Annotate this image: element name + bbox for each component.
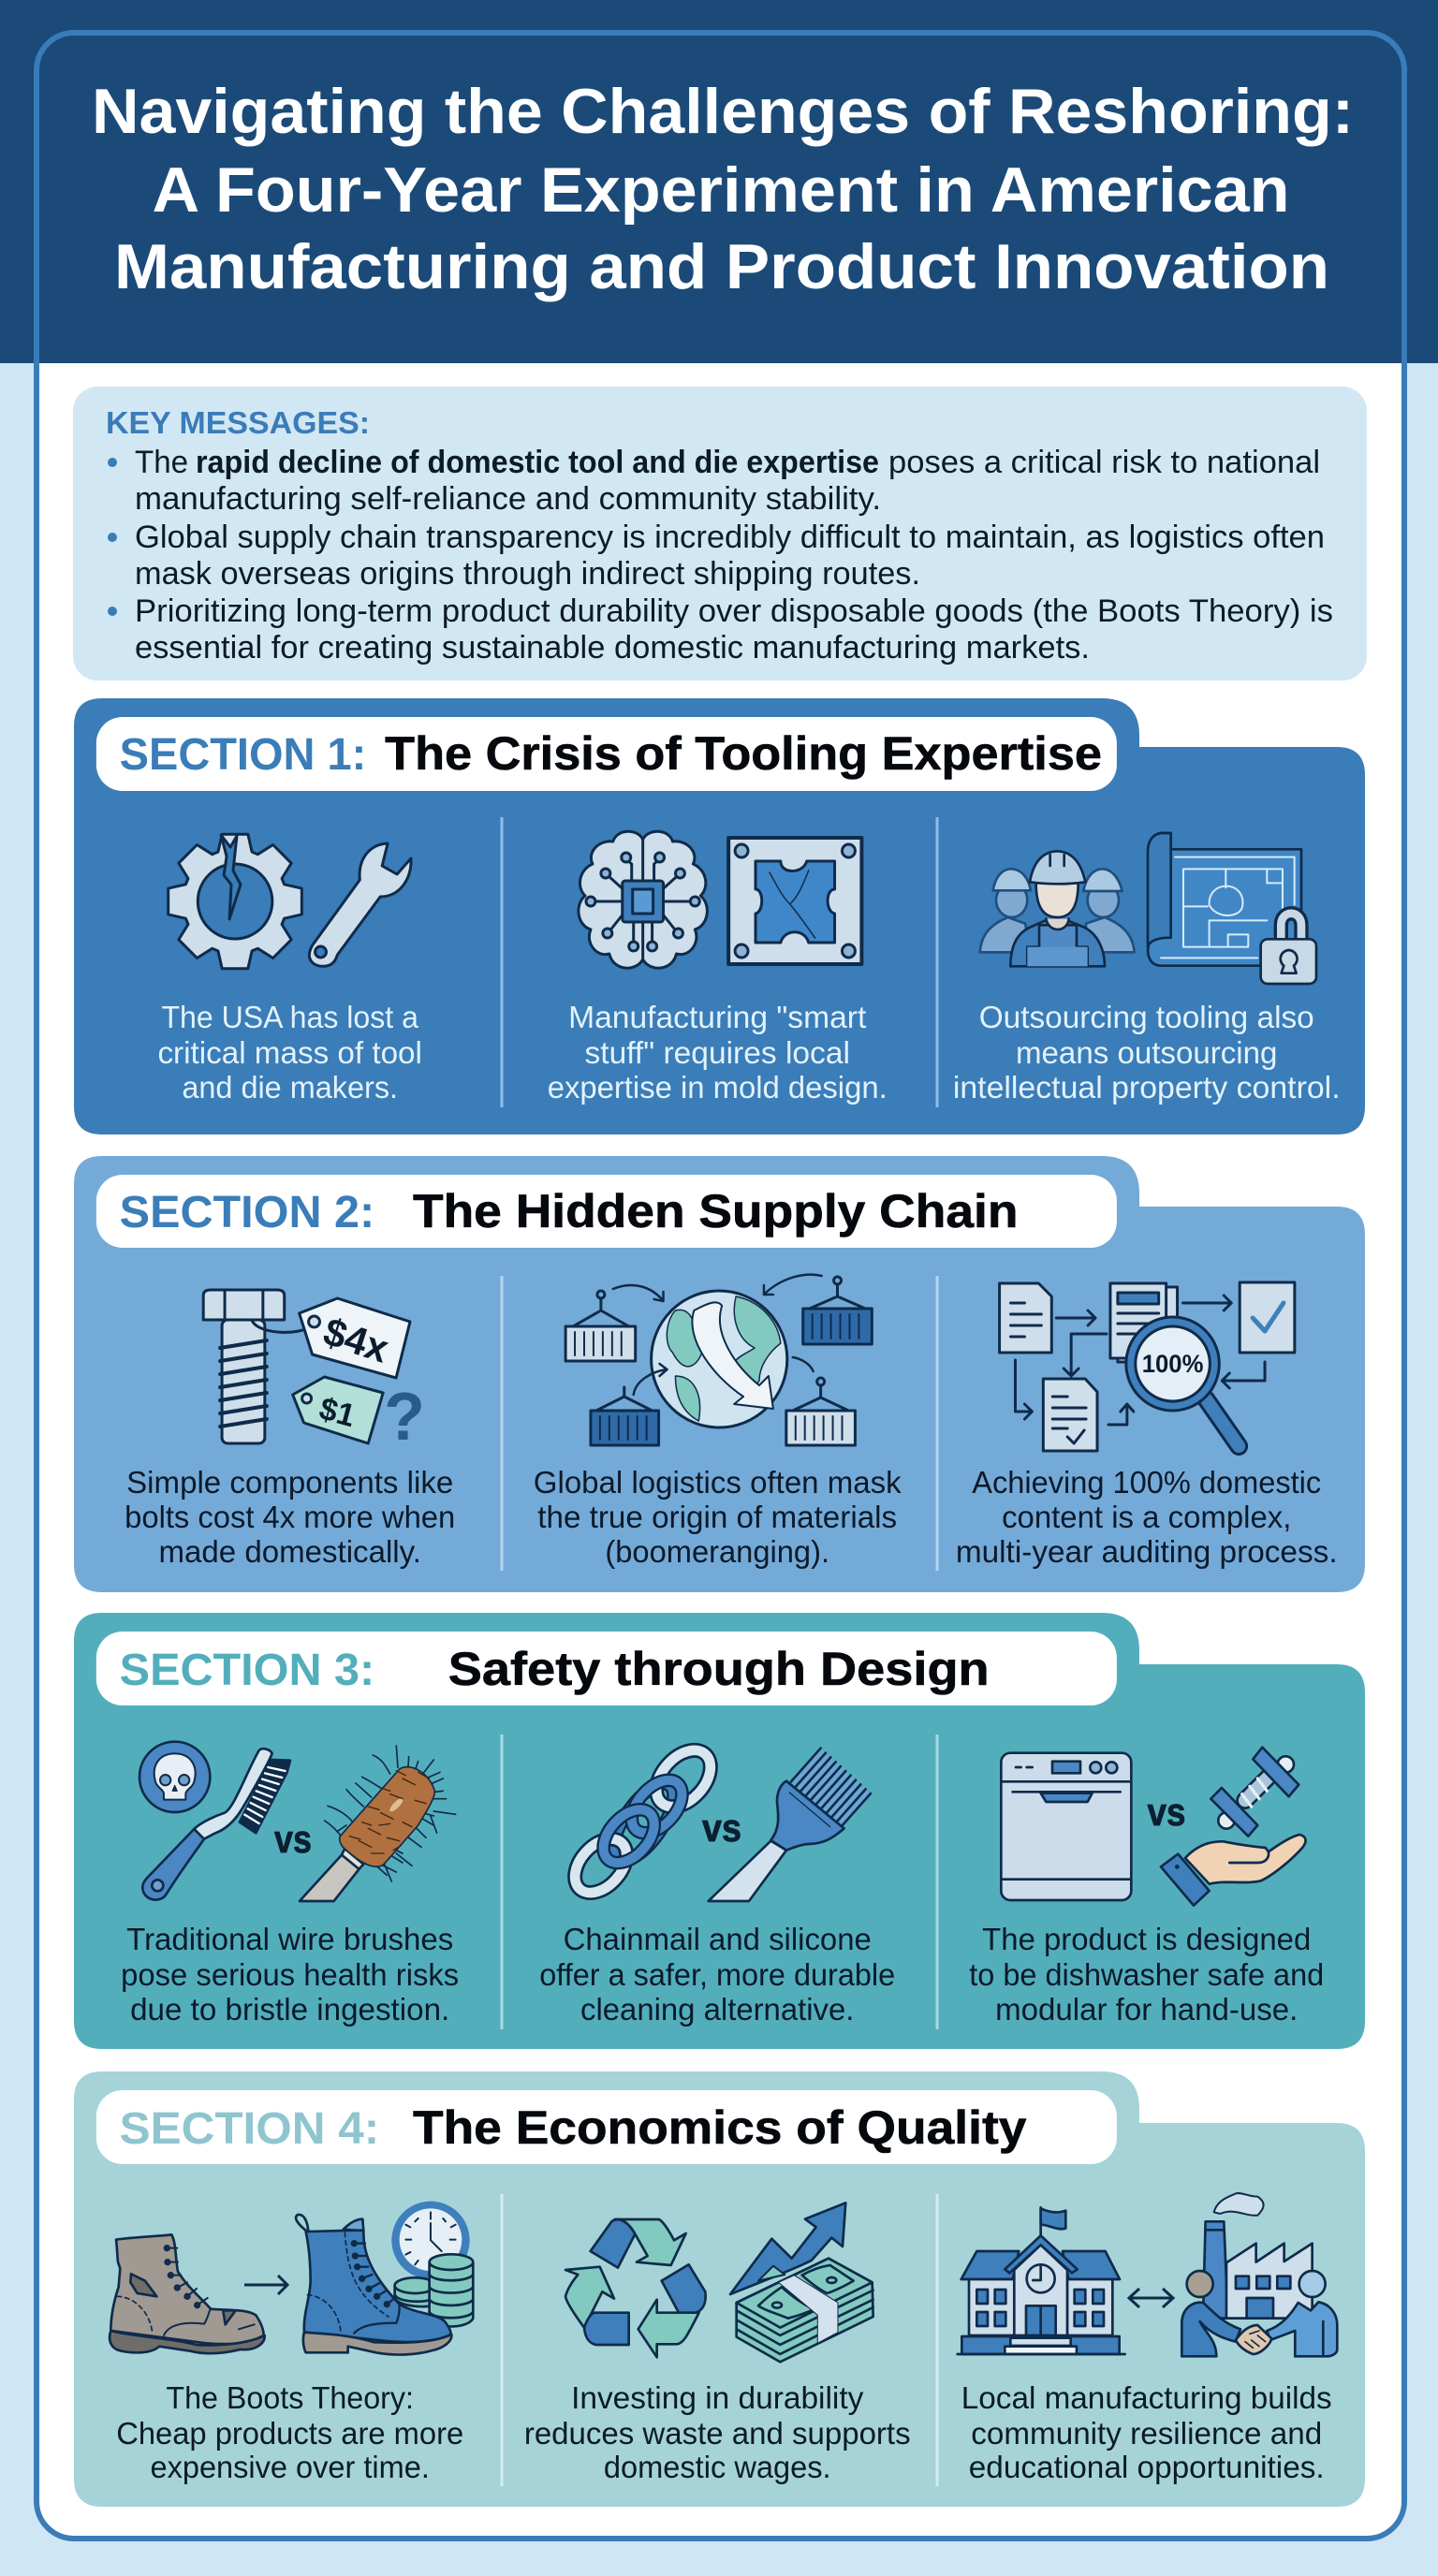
column texts: section 3: offer a safer, more durable bbox=[539, 1957, 895, 1992]
column texts: section 2: (boomeranging). bbox=[605, 1534, 829, 1569]
text: vs chain: vs bbox=[702, 1806, 741, 1850]
text: vs wire: vs bbox=[274, 1817, 312, 1861]
column texts: section 1: expertise in mold design. bbox=[548, 1070, 888, 1105]
column texts: section 2: made domestically. bbox=[158, 1534, 421, 1569]
icon: factory and handshake bbox=[1181, 2193, 1337, 2356]
column texts: section 1: means outsourcing bbox=[1016, 1035, 1277, 1070]
icon: cracked gear bbox=[169, 834, 301, 969]
icon: wrench bbox=[309, 843, 411, 966]
icon: wire brush bbox=[142, 1749, 290, 1900]
column texts: section 2: Global logistics often mask bbox=[534, 1465, 902, 1500]
icon: mold plate bbox=[728, 838, 861, 964]
arrow: boot comparison bbox=[244, 2276, 287, 2294]
key message bullets bbox=[108, 458, 117, 616]
column texts: section 1: Outsourcing tooling also bbox=[979, 1000, 1314, 1034]
icon: price tag $1: ? bbox=[384, 1380, 425, 1455]
column texts: section 3: The product is designed bbox=[982, 1922, 1311, 1956]
icon: brain with chip bbox=[579, 831, 707, 968]
column texts: section 4: educational opportunities. bbox=[969, 2450, 1325, 2484]
panel: section 3 bbox=[74, 1613, 1365, 2049]
column texts: section 4: Investing in durability bbox=[571, 2380, 864, 2415]
section 1 heading: SECTION 1: bbox=[120, 730, 366, 780]
section 2 heading: SECTION 2: bbox=[120, 1188, 374, 1237]
key messages text: rapid decline of domestic tool and die expertise bbox=[196, 445, 879, 480]
column texts: section 1: and die makers. bbox=[182, 1070, 398, 1105]
icon: price tag $4x: $4x bbox=[318, 1309, 394, 1371]
panel: section 2 bbox=[74, 1156, 1365, 1592]
icon: price tag $1: $1 bbox=[315, 1391, 359, 1434]
key messages text: mask overseas origins through indirect shipping routes. bbox=[135, 556, 920, 592]
column texts: section 4: expensive over time. bbox=[151, 2450, 430, 2484]
section 1 heading: The Crisis of Tooling Expertise bbox=[385, 727, 1102, 780]
icon: shipping containers bbox=[565, 1275, 872, 1445]
arrow: two-way link bbox=[1129, 2289, 1173, 2307]
section 4 heading bbox=[96, 2090, 1117, 2164]
column texts: section 1: stuff" requires local bbox=[584, 1035, 850, 1070]
column texts: section 3: due to bristle ingestion. bbox=[130, 1992, 449, 2027]
title: Manufacturing and Product Innovation bbox=[114, 231, 1329, 302]
panel: section 4 bbox=[74, 2071, 1365, 2507]
section 2 heading: The Hidden Supply Chain bbox=[413, 1185, 1018, 1237]
icon: chain links bbox=[565, 1740, 721, 1903]
icon: new blue boot bbox=[296, 2215, 451, 2355]
column texts: section 2: content is a complex, bbox=[1002, 1500, 1291, 1534]
section 3 heading: Safety through Design bbox=[448, 1643, 990, 1695]
icon: clock and coins bbox=[391, 2202, 473, 2326]
key messages text: Global supply chain transparency is incredibly difficult to maintain, as logistics often bbox=[135, 520, 1325, 555]
column texts: section 4: community resilience and bbox=[971, 2416, 1322, 2451]
icon: dishwasher bbox=[1001, 1753, 1131, 1900]
column texts: section 4: Cheap products are more bbox=[116, 2416, 463, 2451]
panel: section 1 bbox=[74, 698, 1365, 1134]
icon: rusty brush bbox=[300, 1746, 456, 1901]
title: Navigating the Challenges of Reshoring: bbox=[92, 76, 1354, 147]
column texts: section 1: The USA has lost a bbox=[161, 1000, 419, 1034]
column texts: section 4: Local manufacturing builds bbox=[961, 2380, 1332, 2415]
key messages text: manufacturing self-reliance and community stability. bbox=[135, 481, 881, 517]
icon: hand bbox=[1161, 1835, 1306, 1906]
column texts: section 2: bolts cost 4x more when bbox=[125, 1500, 455, 1534]
icon: bolt bbox=[203, 1290, 313, 1443]
icon: stack of money bbox=[737, 2259, 873, 2362]
icon: skull warning bbox=[139, 1742, 210, 1812]
column texts: section 3: cleaning alternative. bbox=[580, 1992, 854, 2027]
column texts: section 1: critical mass of tool bbox=[157, 1035, 422, 1070]
key messages text: essential for creating sustainable domestic manufacturing markets. bbox=[135, 630, 1090, 666]
section 2 heading bbox=[96, 1175, 1117, 1248]
column texts: section 3: modular for hand-use. bbox=[995, 1992, 1298, 2027]
column texts: section 1: Manufacturing "smart bbox=[568, 1000, 866, 1034]
column texts: section 3: Traditional wire brushes bbox=[126, 1922, 453, 1956]
section 4 heading: The Economics of Quality bbox=[413, 2101, 1027, 2154]
title bbox=[92, 76, 1354, 302]
key messages text: Prioritizing long-term product durability over disposable goods (the Boots Theory) is bbox=[135, 593, 1333, 629]
panel: key messages bbox=[73, 387, 1367, 681]
icon: auditing documents with magnifier bbox=[1000, 1282, 1295, 1451]
icon: rising arrow bbox=[730, 2203, 845, 2294]
column texts: section 1 bbox=[157, 1000, 1341, 1105]
column texts: section 4 bbox=[116, 2380, 1332, 2484]
icon: auditing documents with magnifier: 100% bbox=[1142, 1350, 1203, 1378]
column texts: section 4: The Boots Theory: bbox=[166, 2380, 414, 2415]
icon: price tag $4x bbox=[300, 1298, 410, 1378]
icon: price tag $1 bbox=[293, 1377, 425, 1455]
key messages text: The bbox=[135, 445, 188, 480]
section 3 heading: SECTION 3: bbox=[120, 1646, 374, 1695]
icon: modular part bbox=[1211, 1748, 1299, 1837]
column texts: section 3: to be dishwasher safe and bbox=[969, 1957, 1324, 1992]
icon: recycling arrows bbox=[565, 2219, 706, 2357]
column texts: section 3 bbox=[121, 1922, 1324, 2027]
key messages text: poses a critical risk to national bbox=[888, 445, 1320, 480]
text: vs dishwasher: vs bbox=[1148, 1790, 1185, 1834]
column texts: section 3: pose serious health risks bbox=[121, 1957, 459, 1992]
column texts: section 2: the true origin of materials bbox=[537, 1500, 897, 1534]
column texts: section 4: reduces waste and supports bbox=[524, 2416, 911, 2451]
column texts: section 2: Simple components like bbox=[126, 1465, 453, 1500]
icon: silicone brush bbox=[709, 1749, 871, 1901]
icon: globe with arrow bbox=[652, 1291, 787, 1427]
column texts: section 3: Chainmail and silicone bbox=[564, 1922, 872, 1956]
section 4 heading: SECTION 4: bbox=[120, 2104, 379, 2154]
column texts: section 2 bbox=[125, 1465, 1338, 1569]
icon: school bbox=[958, 2207, 1125, 2354]
column texts: section 2: Achieving 100% domestic bbox=[972, 1465, 1321, 1500]
column texts: section 4: domestic wages. bbox=[604, 2450, 831, 2484]
title: A Four-Year Experiment in American bbox=[152, 154, 1290, 226]
icon: worn boot bbox=[110, 2234, 265, 2353]
column texts: section 2: multi-year auditing process. bbox=[956, 1534, 1338, 1569]
key messages heading: KEY MESSAGES: bbox=[106, 405, 370, 440]
icon: workers bbox=[980, 851, 1135, 966]
section 1 heading bbox=[96, 717, 1117, 791]
icon: blueprint with padlock bbox=[1148, 833, 1316, 984]
key messages text bbox=[135, 445, 1333, 666]
section 3 heading bbox=[96, 1632, 1117, 1705]
column texts: section 1: intellectual property control. bbox=[953, 1070, 1341, 1105]
